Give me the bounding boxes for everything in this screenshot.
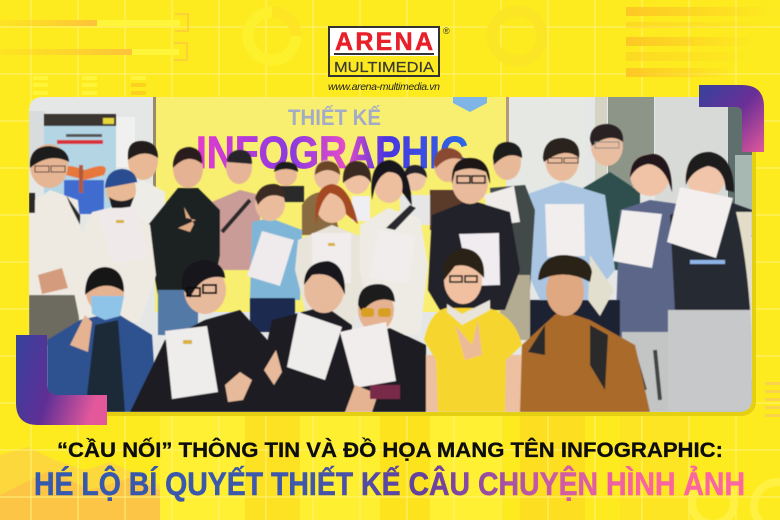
man smiling with certificate (252, 261, 352, 412)
girl with cap and mask (68, 169, 156, 322)
logo: Arena Multimedia: MULTIMEDIA (334, 59, 434, 76)
bracket: top-right gradient corner (699, 85, 764, 152)
website address: www.arena-multimedia.vn (328, 81, 440, 93)
man in black shirt with tattoo (428, 158, 520, 310)
man in pink tee with cap (212, 150, 260, 270)
certificate: blue top woman (247, 231, 294, 286)
man in white polo (29, 144, 81, 346)
boy in yellow polo (424, 248, 522, 412)
man with red-brown hair (429, 147, 464, 230)
boy with glasses and certificate (484, 142, 535, 340)
man in white shirt (127, 140, 166, 224)
screen badge (453, 97, 487, 112)
headline line 1: “CẦU NỐI” THÔNG TIN VÀ ĐỒ HỌA MANG TÊN INFOGRAPHIC: (57, 438, 723, 462)
boy at the back (274, 162, 304, 202)
certificate: navy tee woman (613, 210, 662, 268)
bracket: bottom-left gradient corner (16, 335, 107, 425)
woman in navy tee (615, 154, 685, 412)
girl with brown jacket (302, 160, 340, 235)
woman in ao dai (360, 160, 428, 335)
certificate: black tee woman (667, 187, 733, 258)
certificates: right group (545, 204, 585, 257)
man in black polo (148, 147, 220, 335)
boy in brown shirt (520, 255, 650, 412)
girl smiling behind (343, 161, 371, 221)
girl behind (400, 165, 430, 225)
orange hair woman (295, 184, 368, 330)
woman in black tee (668, 152, 752, 412)
screen heading INFOGRAPHIC: INFOGRAPHIC (196, 127, 468, 178)
people in the photo (29, 124, 752, 412)
man with blue face mask (47, 267, 155, 412)
screen title: THIẾT KẾ (288, 105, 381, 130)
photo shadow (33, 101, 756, 416)
man in black with certificate (130, 260, 272, 412)
logo: Arena Multimedia: ® (443, 26, 450, 36)
photo background: room and screen (29, 97, 752, 412)
logo: Arena Multimedia (329, 26, 450, 76)
photo: group with certificates (29, 97, 752, 412)
man with orange sunglasses (340, 284, 426, 412)
woman in light blue (250, 184, 302, 332)
logo: Arena Multimedia: ARENA (335, 28, 433, 56)
poster (44, 114, 116, 214)
front row people (47, 248, 650, 412)
man with dark jacket (580, 124, 640, 270)
back row people (29, 124, 752, 412)
man in blue shirt (528, 137, 620, 338)
